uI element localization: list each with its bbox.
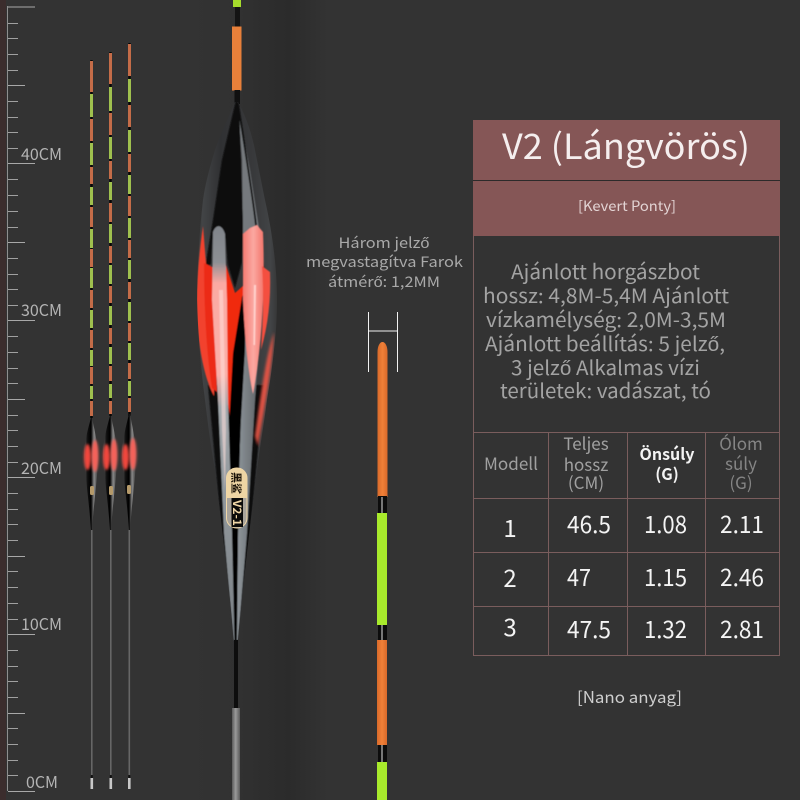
recommendation text: Ajánlott beállítás: 5 jelző, [485, 328, 725, 357]
row 3: 3 [503, 608, 517, 643]
subtitle: [Kevert Ponty] [578, 196, 676, 216]
row 2: 1.15 [644, 558, 687, 593]
row 1 [503, 505, 764, 544]
row 1: 1 [503, 509, 517, 544]
stem [232, 640, 240, 800]
row 2: 2 [503, 559, 517, 594]
row 1: 1.08 [644, 505, 687, 540]
caption: tail diameter [306, 232, 463, 292]
header: own weight: (G) [655, 461, 679, 485]
header: total length: Teljes [563, 430, 609, 455]
caption: tail diameter: Három jelző [338, 232, 430, 253]
ruler scale [8, 6, 62, 793]
recommendation text: 3 jelző Alkalmas vízi [511, 352, 700, 381]
row 1: 46.5 [567, 505, 611, 540]
upper black crown [205, 100, 243, 288]
right black line [238, 104, 264, 270]
row 3: 1.32 [644, 610, 687, 645]
header: lead weight: súly [725, 450, 757, 475]
header: model: Modell [484, 450, 538, 475]
header: lead weight: Ólom [719, 430, 763, 455]
recommendation text: vízkamélység: 2,0M-3,5M [486, 304, 726, 333]
panel: title band [473, 119, 780, 180]
title: V2 (Lángvörös) [502, 119, 750, 170]
header: total length: hossz [564, 451, 608, 476]
ruler label 30CM: 30CM [21, 297, 62, 321]
lower dark underlay [208, 385, 264, 640]
recommendation text: Ajánlott horgászbot [511, 256, 700, 285]
row 2: 2.46 [720, 558, 764, 593]
recommendation text [483, 256, 729, 404]
centre black [228, 295, 246, 640]
header: total length: (CM) [568, 469, 604, 494]
right lower grey [236, 336, 258, 640]
header: lead weight [719, 430, 763, 494]
row 1: 2.11 [720, 505, 764, 540]
right pink stripe [243, 225, 264, 394]
row 2 [503, 558, 764, 594]
header: lead weight: (G) [729, 469, 753, 494]
dimension marker [368, 312, 398, 372]
caption: tail diameter: átmérő: 1,2MM [328, 271, 440, 292]
panel: subtitle band [473, 181, 780, 236]
small float 3 [122, 43, 136, 789]
top antenna [232, 0, 242, 104]
model badge: V2-1 [229, 499, 245, 526]
model badge [226, 468, 247, 528]
small float 1 [84, 60, 98, 789]
footer note: [Nano anyag] [577, 684, 682, 708]
row 3: 2.81 [720, 610, 764, 645]
tail close-up [377, 342, 388, 800]
float body [197, 102, 277, 641]
header: own weight [640, 441, 694, 485]
recommendation text: területek: vadászat, tó [500, 375, 711, 404]
ruler label 0CM: 0CM [26, 769, 58, 793]
header: own weight: Önsúly [640, 441, 694, 465]
row 3: 47.5 [567, 610, 611, 645]
right red streak [255, 332, 274, 446]
row 2: 47 [567, 558, 591, 593]
left long stripe [212, 226, 234, 640]
left red band [197, 226, 216, 396]
caption: tail diameter: megvastagítva Farok [306, 251, 463, 272]
large float close-up [195, 0, 279, 800]
header: total length [563, 430, 609, 494]
ruler label 10CM: 10CM [21, 611, 62, 635]
centre red [225, 264, 244, 418]
ruler label 20CM: 20CM [21, 455, 62, 479]
small float 2 [103, 52, 118, 789]
specification table [473, 236, 780, 656]
right red band [261, 266, 270, 350]
recommendation text: hossz: 4,8M-5,4M Ajánlott [483, 280, 729, 309]
model badge: 黑鲨 [228, 472, 244, 494]
row 3 [503, 608, 764, 645]
upper grey panel [238, 120, 260, 234]
ruler label 40CM: 40CM [21, 141, 62, 165]
